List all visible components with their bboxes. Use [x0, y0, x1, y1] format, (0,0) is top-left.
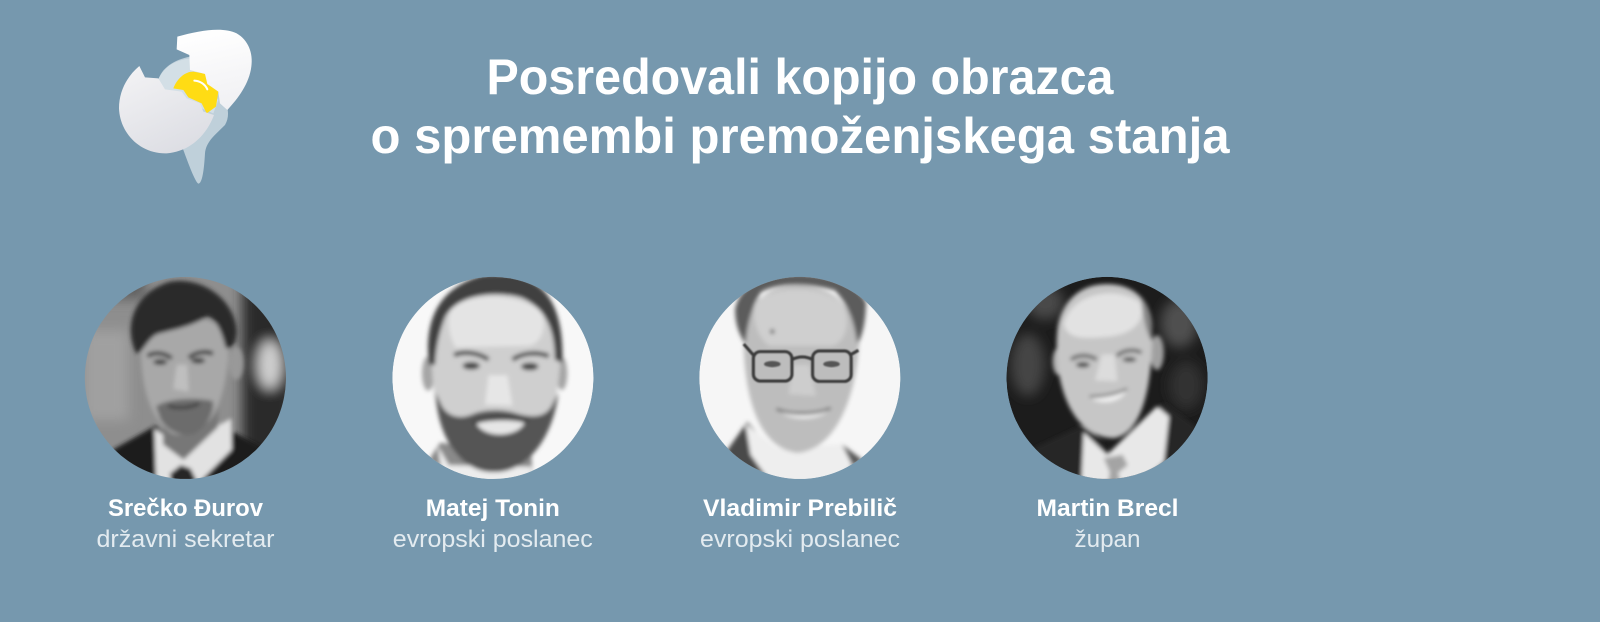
name: Srečko Đurov: Srečko Đurov [108, 495, 264, 522]
person: Vladimir Prebilič [699, 274, 900, 553]
name: Matej Tonin: Matej Tonin [426, 495, 560, 522]
portrait: Martin Brecl [1006, 277, 1208, 489]
person: Matej Tonin [392, 274, 593, 553]
title: o spremembi premoženjskega stanja [370, 108, 1231, 164]
role: državni sekretar: državni sekretar [96, 526, 275, 553]
person: Srečko Đurov [84, 271, 294, 553]
role: župan: župan [1074, 526, 1140, 553]
glasses [744, 344, 858, 381]
icon: cracked egg with yolk [119, 30, 252, 184]
person: Martin Brecl [1006, 277, 1208, 553]
role: evropski poslanec: evropski poslanec [393, 526, 593, 553]
portrait: Matej Tonin [392, 274, 593, 489]
infographic canvas [84, 30, 1230, 552]
title [370, 49, 1231, 164]
portrait: Srečko Đurov [84, 277, 286, 479]
role: evropski poslanec: evropski poslanec [700, 526, 900, 553]
name: Martin Brecl: Martin Brecl [1036, 495, 1178, 522]
title: Posredovali kopijo obrazca [486, 49, 1115, 105]
portrait: Vladimir Prebilič [699, 274, 900, 489]
name: Vladimir Prebilič: Vladimir Prebilič [703, 495, 897, 522]
